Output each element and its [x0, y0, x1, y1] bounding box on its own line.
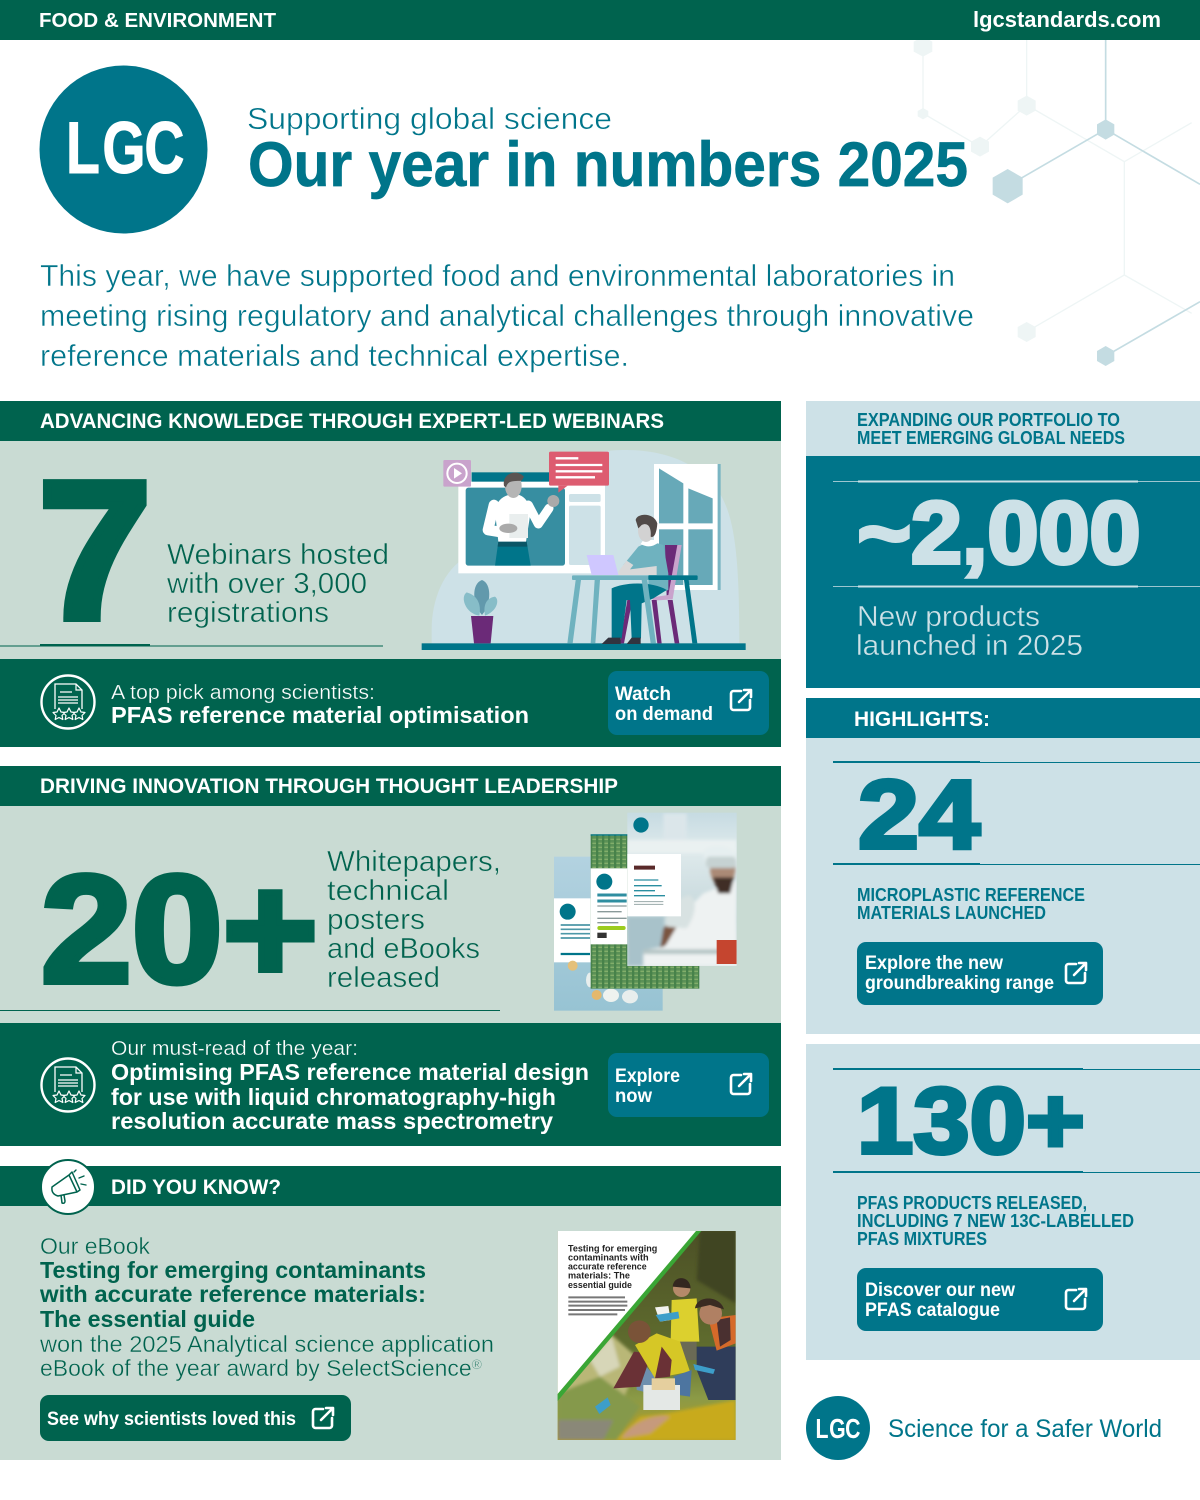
stat label: whitepapers	[327, 846, 501, 994]
illustration: ebook cover: essential guide	[568, 1280, 632, 1290]
callout text: must-read: for use with liquid chromatography-high	[111, 1084, 556, 1110]
heading: thought leadership	[0, 766, 781, 806]
icon: document with stars	[42, 676, 94, 728]
text: ebook award	[39, 1233, 494, 1381]
footer logo and tagline: Science for a Safer World	[888, 1415, 1162, 1443]
button: PFAS catalogue	[857, 1268, 1103, 1331]
heading: thought leadership: DRIVING INNOVATION THROUGH THOUGHT LEADERSHIP	[40, 775, 618, 798]
illustration: stacked publications	[554, 813, 737, 1011]
icon: document with stars	[42, 1058, 94, 1112]
button: watch on demand: Watch	[615, 684, 671, 705]
callout text: top pick: A top pick among scientists:	[111, 682, 375, 704]
panel background: did you know	[0, 1166, 781, 1460]
stat label: microplastics	[857, 885, 1085, 923]
panel background: thought leadership	[0, 766, 781, 1146]
heading: webinars	[0, 401, 781, 441]
button: PFAS catalogue: Discover our new	[865, 1280, 1015, 1301]
panel: microplastics	[806, 738, 1200, 1034]
text: ebook award: Our eBook	[40, 1233, 150, 1259]
stat label: webinars hosted: registrations	[167, 597, 329, 629]
stat label: webinars hosted	[166, 539, 389, 629]
callout band: must-read	[0, 1023, 781, 1146]
text: ebook award: The essential guide	[40, 1306, 255, 1332]
panel: portfolio heading	[806, 401, 1200, 456]
stat label: new products: launched in 2025	[856, 630, 1083, 662]
stat: 24: 24	[858, 760, 980, 869]
button: watch on demand	[608, 671, 769, 735]
button: PFAS catalogue: PFAS catalogue	[865, 1300, 1000, 1321]
button: explore new range	[857, 942, 1103, 1005]
heading: highlights: HIGHLIGHTS:	[854, 708, 990, 731]
footer logo and tagline: LGC	[815, 1413, 861, 1445]
text: ebook award: Testing for emerging contaminants	[40, 1257, 426, 1283]
button: watch on demand: on demand	[615, 704, 713, 725]
stat label: PFAS products: PFAS PRODUCTS RELEASED,	[857, 1193, 1087, 1213]
stat label: whitepapers: released	[327, 962, 440, 994]
illustration: ebook cover: materials: The	[568, 1271, 630, 1281]
illustration: ebook cover: contaminants with	[568, 1253, 649, 1263]
title: Our year in numbers 2025	[248, 130, 968, 200]
stat label: new products	[856, 601, 1083, 662]
button: explore now: now	[615, 1086, 652, 1107]
panel background: webinars	[0, 401, 781, 747]
text: ebook award: won the 2025 Analytical science application	[39, 1331, 494, 1357]
panel: did you know	[0, 1160, 781, 1460]
stat label: PFAS products: PFAS MIXTURES	[857, 1229, 987, 1249]
illustration: webinar scene	[422, 450, 746, 650]
title	[247, 101, 968, 200]
intro text	[40, 258, 974, 373]
title: Supporting global science	[247, 101, 612, 136]
panel: thought leadership	[0, 766, 781, 1146]
callout text: must-read	[111, 1038, 589, 1134]
text: ebook award: ®	[472, 1356, 483, 1372]
panel: portfolio heading: EXPANDING OUR PORTFOLIO TO	[857, 410, 1120, 430]
panel: portfolio heading: MEET EMERGING GLOBAL NEEDS	[857, 428, 1125, 448]
intro text: This year, we have supported food and environmental laboratories in	[40, 258, 955, 293]
decorative molecule pattern	[914, 37, 1200, 366]
callout text: must-read: Optimising PFAS reference material design	[111, 1059, 589, 1085]
stat label: webinars hosted: with over 3,000	[166, 568, 367, 600]
callout text: top pick: PFAS reference material optimisation	[111, 702, 529, 728]
illustration: ebook cover: Testing for emerging	[568, 1243, 657, 1253]
stat label: whitepapers: technical	[327, 875, 449, 907]
stat label: whitepapers: Whitepapers,	[327, 846, 501, 878]
callout text: must-read: Our must-read of the year:	[111, 1038, 358, 1060]
stat label: whitepapers: and eBooks	[327, 933, 480, 965]
button: explore now: Explore	[615, 1066, 680, 1087]
top bar	[0, 0, 1200, 40]
illustration: ebook cover: accurate reference	[568, 1262, 647, 1272]
illustration: ebook cover	[558, 1231, 736, 1440]
button: explore new range: Explore the new	[865, 953, 1003, 974]
heading: did you know: DID YOU KNOW?	[111, 1176, 281, 1199]
callout text: must-read: resolution accurate mass spectrometry	[111, 1108, 553, 1134]
stat label: PFAS products	[857, 1193, 1134, 1249]
button: see why scientists loved this	[40, 1395, 351, 1441]
logo: LGC: LGC	[66, 107, 184, 189]
stat: 20+: 20+	[41, 844, 318, 1015]
stat: 130+: 130+	[857, 1068, 1085, 1173]
stat label: webinars hosted: Webinars hosted	[167, 539, 389, 571]
intro text: reference materials and technical expertise.	[40, 338, 629, 373]
button: explore now	[608, 1053, 769, 1117]
stat label: whitepapers: posters	[327, 904, 425, 936]
heading: highlights	[806, 698, 1200, 738]
stat: ~2,000: ~2,000	[858, 483, 1140, 582]
callout band: top pick	[0, 659, 781, 747]
intro text: meeting rising regulatory and analytical challenges through innovative	[40, 298, 974, 333]
heading: webinars: ADVANCING KNOWLEDGE THROUGH EXPERT-LED WEBINARS	[40, 410, 664, 433]
stat label: microplastics: MATERIALS LAUNCHED	[857, 903, 1046, 923]
panel: webinars	[0, 401, 781, 747]
icon: megaphone	[41, 1160, 95, 1214]
footer logo and tagline	[806, 1396, 1162, 1460]
button: see why scientists loved this: See why scientists loved this	[47, 1409, 296, 1430]
stat label: microplastics: MICROPLASTIC REFERENCE	[857, 885, 1085, 905]
logo: LGC	[40, 66, 208, 234]
callout text: top pick	[111, 682, 529, 728]
top bar: FOOD & ENVIRONMENT	[39, 10, 276, 32]
button: explore new range: groundbreaking range	[865, 973, 1054, 994]
panel: new products	[806, 456, 1200, 688]
stat label: PFAS products: INCLUDING 7 NEW 13C-LABELLED	[857, 1211, 1134, 1231]
stat label: new products: New products	[857, 601, 1040, 633]
heading: did you know	[0, 1166, 781, 1206]
top bar: lgcstandards.com	[973, 7, 1161, 32]
stat: 7: 7	[38, 441, 151, 660]
text: ebook award: with accurate reference materials:	[39, 1281, 426, 1307]
panel: PFAS products	[806, 1044, 1200, 1360]
text: ebook award: eBook of the year award by SelectScience	[40, 1355, 472, 1381]
